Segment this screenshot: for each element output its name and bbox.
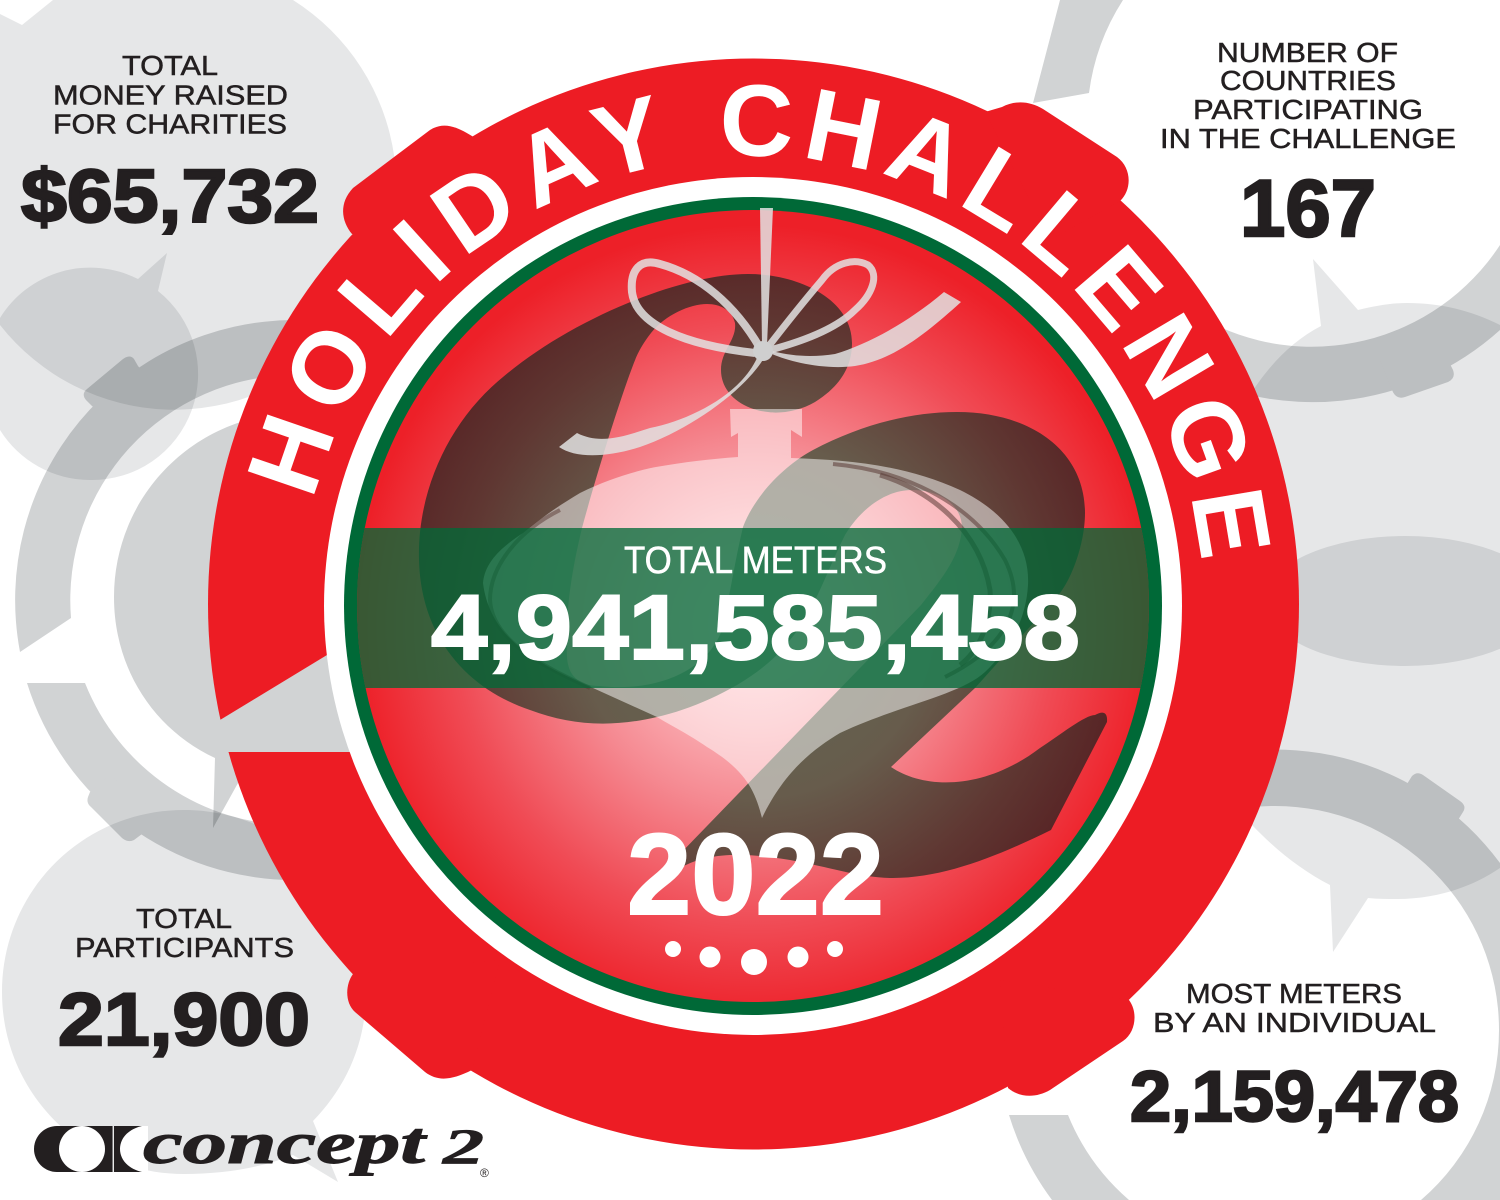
green total meters band <box>340 528 1170 688</box>
year: 2022 <box>627 811 884 939</box>
countries label: PARTICIPATING <box>1193 94 1423 125</box>
red disc <box>208 58 1299 1150</box>
most meters label <box>1153 978 1436 1038</box>
countries label: COUNTRIES <box>1220 65 1396 96</box>
total meters label: TOTAL METERS <box>624 540 887 582</box>
shoulder tab: top left <box>343 126 500 240</box>
shoulder tab: top right <box>985 102 1129 240</box>
countries label <box>1160 37 1456 154</box>
green ring <box>344 197 1162 1015</box>
stat: most meters <box>1130 978 1459 1137</box>
red ring badge <box>208 58 1299 1150</box>
participants label: PARTICIPANTS <box>75 932 294 963</box>
logo mark <box>34 1126 148 1172</box>
money raised label: FOR CHARITIES <box>53 108 287 140</box>
logo wordmark: concept <box>143 1110 427 1176</box>
background: circular arrow ring, left <box>15 320 295 880</box>
most meters value: 2,159,478 <box>1130 1058 1459 1137</box>
logo numeral: 2 <box>441 1118 484 1174</box>
background: filled center-left bubble <box>114 413 482 828</box>
ornament highlight: right inner <box>880 475 990 665</box>
background: top-left speech bubble <box>0 0 396 410</box>
white ring <box>324 177 1182 1035</box>
stat: countries <box>1160 37 1456 254</box>
shoulder tab: bottom left <box>347 960 500 1079</box>
money raised value: $65,732 <box>21 154 319 238</box>
five decorative dots <box>665 941 843 975</box>
background: right speech bubble <box>1190 259 1500 952</box>
most meters label: MOST METERS <box>1186 978 1402 1009</box>
ornament highlight: right <box>833 464 1014 677</box>
background: lower-left speech bubble <box>2 810 366 1182</box>
money raised label: MONEY RAISED <box>53 80 288 110</box>
bow left tail <box>559 358 764 455</box>
background: small bubble at left <box>0 253 198 480</box>
ornament disc gradient <box>357 210 1149 1002</box>
bow knot <box>753 341 773 361</box>
stat: participants <box>58 903 310 1061</box>
participants label <box>75 903 294 963</box>
ornament highlight: left <box>490 510 590 688</box>
curved title: HOLIDAY CHALLENGE <box>248 84 1270 558</box>
total meters value: 4,941,585,458 <box>431 577 1080 679</box>
registered mark: ® <box>480 1166 489 1180</box>
arrow gap cut into ring <box>217 640 380 752</box>
bow left loop <box>632 262 760 353</box>
shoulder tab: bottom right <box>1000 980 1135 1096</box>
countries value: 167 <box>1240 164 1376 254</box>
participants value: 21,900 <box>58 978 310 1061</box>
background: circular arrow ring, bottom right <box>1009 750 1500 1200</box>
most meters label: BY AN INDIVIDUAL <box>1153 1007 1436 1038</box>
big numeral 2 silhouette <box>419 274 1107 878</box>
money raised label <box>53 50 288 140</box>
stat: money raised <box>21 50 319 238</box>
countries label: NUMBER OF <box>1217 37 1398 68</box>
ornament body and cap <box>483 409 1028 818</box>
concept2 logo <box>34 1110 489 1180</box>
hanging ribbon <box>760 208 773 345</box>
participants label: TOTAL <box>136 903 232 934</box>
bow right tail <box>772 292 961 367</box>
bow right loop <box>768 262 874 350</box>
ribbon bow <box>559 208 961 455</box>
countries label: IN THE CHALLENGE <box>1160 123 1456 154</box>
glass ornament <box>483 409 1028 818</box>
background: darker mid-right bubble <box>1265 536 1500 666</box>
money raised label: TOTAL <box>122 50 218 81</box>
background: circular arrow ring, top right <box>1033 0 1500 402</box>
